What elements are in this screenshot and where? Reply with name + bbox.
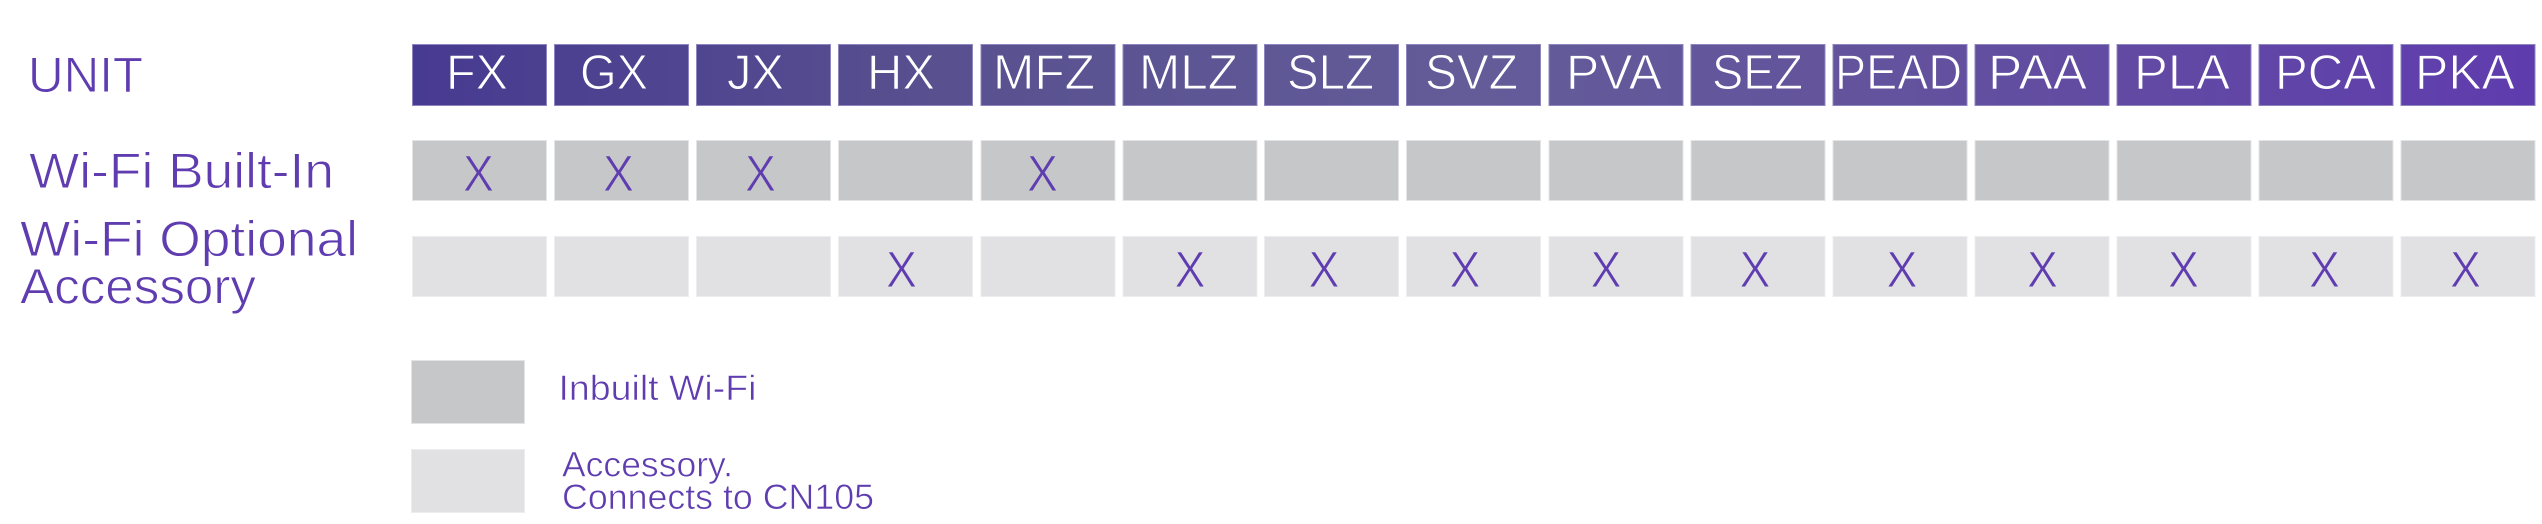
- cell: HX optional, marked X: X: [886, 241, 917, 298]
- heading: Wi-Fi Optional Accessory row label: Wi-Fi Optional: [20, 211, 358, 267]
- unit cell: FX: [412, 44, 546, 106]
- cell: PVA optional, marked X: [1549, 236, 1683, 298]
- cell: PAA built-in, empty: [1975, 140, 2109, 200]
- unit cell: SVZ: [1406, 44, 1540, 106]
- cell: PCA optional, marked X: [2259, 236, 2393, 298]
- cell: PLA built-in, empty: [2117, 140, 2251, 200]
- cell: PKA optional, marked X: X: [2450, 241, 2481, 298]
- cell: PEAD built-in, empty: [1833, 140, 1967, 200]
- unit cell: PLA: PLA: [2134, 46, 2230, 100]
- cell: PAA optional, marked X: [1975, 236, 2109, 298]
- cell: FX built-in, marked X: [412, 140, 546, 202]
- unit cell: PEAD: PEAD: [1835, 46, 1962, 100]
- cell: MLZ optional, marked X: X: [1174, 241, 1206, 298]
- cell: SLZ optional, marked X: [1264, 236, 1398, 298]
- unit cell: SLZ: [1264, 44, 1398, 106]
- legend item: inbuilt Wi-Fi: [412, 360, 756, 424]
- cell: PVA optional, marked X: X: [1590, 241, 1622, 298]
- cell: PEAD optional, marked X: X: [1886, 241, 1918, 298]
- cell: SVZ optional, marked X: X: [1450, 241, 1480, 298]
- cell: SVZ built-in, empty: [1406, 140, 1540, 200]
- unit cell: SEZ: [1691, 44, 1825, 106]
- legend item: inbuilt Wi-Fi: Inbuilt Wi-Fi: [558, 369, 756, 408]
- unit cell: SEZ: SEZ: [1712, 46, 1803, 100]
- unit cell: GX: [554, 44, 688, 106]
- unit cell: PVA: PVA: [1566, 46, 1662, 100]
- unit cell: FX: FX: [446, 46, 508, 100]
- cell: SLZ optional, marked X: X: [1308, 241, 1340, 298]
- cell: SLZ built-in, empty: [1264, 140, 1398, 200]
- cell: HX optional, marked X: [838, 236, 972, 298]
- unit cell: PKA: PKA: [2415, 46, 2515, 100]
- cell: JX built-in, marked X: [696, 140, 830, 202]
- cell: MFZ optional, empty: [981, 236, 1115, 296]
- unit cell: PKA: [2401, 44, 2535, 106]
- cell: GX optional, empty: [554, 236, 688, 296]
- cell: SEZ optional, marked X: X: [1740, 241, 1770, 298]
- cell: PLA optional, marked X: X: [2168, 241, 2199, 298]
- cell: HX built-in, empty: [838, 140, 972, 200]
- cell: SVZ optional, marked X: [1406, 236, 1540, 298]
- cell: MLZ built-in, empty: [1123, 140, 1257, 200]
- cell: PEAD optional, marked X: [1833, 236, 1967, 298]
- cell: PKA optional, marked X: [2401, 236, 2535, 298]
- cell: PCA built-in, empty: [2259, 140, 2393, 200]
- cell: PAA optional, marked X: X: [2027, 241, 2058, 298]
- cell: GX built-in, marked X: [554, 140, 688, 202]
- cell: FX optional, empty: [412, 236, 546, 296]
- unit cell: MLZ: MLZ: [1139, 46, 1238, 100]
- panel: Wi-Fi built-in row: [412, 140, 2535, 202]
- cell: JX built-in, marked X: X: [745, 145, 776, 202]
- cell: MFZ built-in, marked X: [981, 140, 1115, 202]
- cell: GX built-in, marked X: X: [603, 145, 634, 202]
- cell: JX optional, empty: [696, 236, 830, 296]
- cell: PCA optional, marked X: X: [2309, 241, 2340, 298]
- unit cell: SVZ: SVZ: [1425, 46, 1518, 100]
- unit cell: PLA: [2117, 44, 2251, 106]
- panel: Wi-Fi optional accessory row: [412, 236, 2535, 298]
- cell: PLA optional, marked X: [2117, 236, 2251, 298]
- cell: PKA built-in, empty: [2401, 140, 2535, 200]
- unit cell: PAA: [1975, 44, 2109, 106]
- cell: MFZ built-in, marked X: X: [1027, 145, 1058, 202]
- heading: Wi-Fi Optional Accessory row label: [20, 211, 358, 314]
- panel: unit header row: [412, 44, 2535, 106]
- unit cell: MFZ: [981, 44, 1115, 106]
- unit cell: PVA: [1549, 44, 1683, 106]
- cell: SEZ built-in, empty: [1691, 140, 1825, 200]
- cell: SEZ optional, marked X: [1691, 236, 1825, 298]
- legend item: accessory connects to CN105: Accessory.: [562, 446, 733, 484]
- legend item: accessory connects to CN105: Connects to CN105: [562, 478, 874, 517]
- unit cell: MLZ: [1123, 44, 1257, 106]
- unit cell: HX: HX: [867, 46, 935, 100]
- legend: [412, 360, 874, 517]
- unit cell: HX: [838, 44, 972, 106]
- unit cell: MFZ: MFZ: [993, 46, 1095, 100]
- unit cell: GX: GX: [580, 46, 648, 100]
- unit cell: JX: JX: [727, 46, 784, 100]
- unit cell: JX: [696, 44, 830, 106]
- heading: UNIT row label: UNIT: [28, 47, 143, 103]
- unit cell: SLZ: SLZ: [1287, 46, 1374, 100]
- heading: Wi-Fi Built-In row label: Wi-Fi Built-In: [29, 143, 334, 199]
- cell: FX built-in, marked X: X: [463, 145, 494, 202]
- unit cell: PCA: [2259, 44, 2393, 106]
- heading: Wi-Fi Optional Accessory row label: Accessory: [20, 258, 256, 314]
- legend item: accessory connects to CN105: [412, 446, 874, 517]
- unit cell: PCA: PCA: [2275, 46, 2376, 100]
- unit cell: PAA: PAA: [1988, 46, 2087, 100]
- cell: PVA built-in, empty: [1549, 140, 1683, 200]
- cell: MLZ optional, marked X: [1123, 236, 1257, 298]
